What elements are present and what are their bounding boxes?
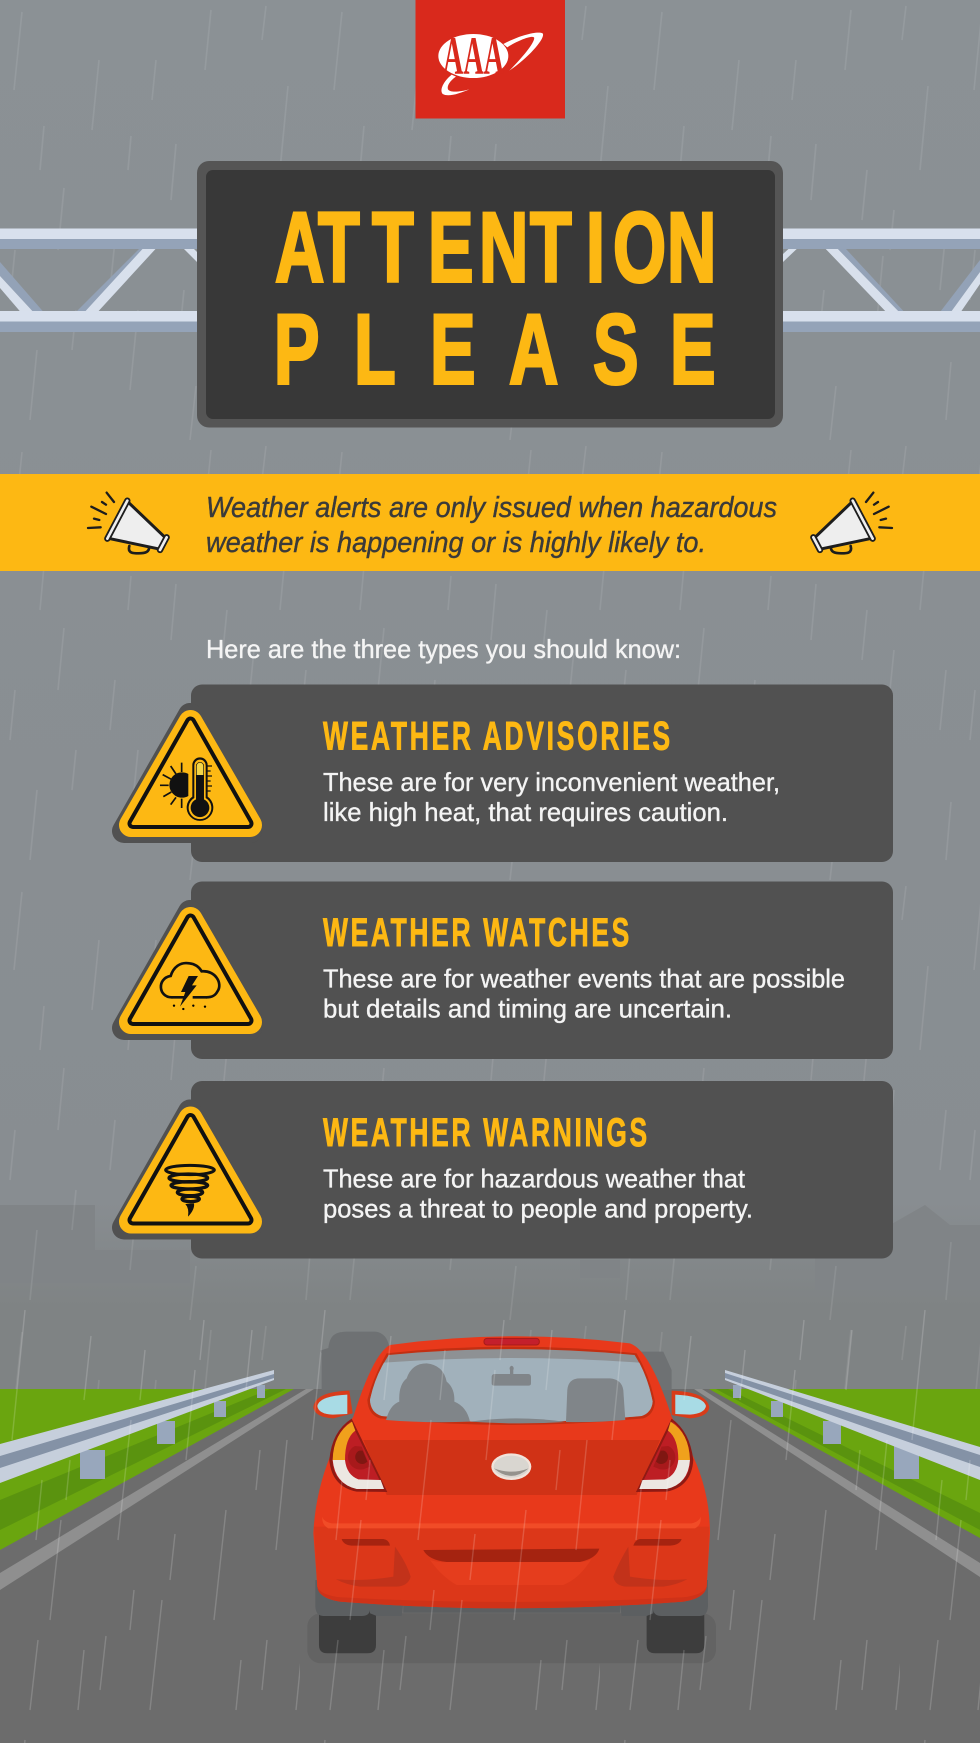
driver seat <box>386 1363 470 1422</box>
card: weather advisories <box>124 684 893 862</box>
window frame <box>367 1347 655 1425</box>
hatch panel <box>363 1440 660 1495</box>
rear parcel shelf <box>470 1418 566 1423</box>
interior rear-view mirror <box>492 1366 531 1386</box>
high-mount brake light <box>484 1338 539 1345</box>
intro text: Here are the three types you should know: <box>206 634 681 664</box>
card: weather warnings <box>124 1081 893 1258</box>
bumper highlight <box>322 1517 701 1528</box>
title line: PLEASE: PLEASE <box>274 295 716 406</box>
road scene <box>0 1389 980 1743</box>
icon: right megaphone <box>813 493 892 553</box>
bumper centre recess <box>430 1559 592 1585</box>
warning triangle with tornado icon <box>124 1112 250 1228</box>
card heading: WEATHER ADVISORIES <box>323 714 670 759</box>
right tail light <box>636 1419 693 1492</box>
card body text: poses a threat to people and property. <box>323 1194 753 1224</box>
rain over the road and car <box>0 1310 980 1743</box>
car ground shadow <box>307 1613 716 1663</box>
car underbody <box>315 1580 708 1616</box>
AAA logo: AAA <box>443 26 504 86</box>
band message text: weather is happening or is highly likely to. <box>206 527 706 559</box>
car wheels <box>319 1607 704 1653</box>
card body text: These are for hazardous weather that <box>323 1164 746 1194</box>
car badge <box>491 1453 531 1480</box>
icon: left megaphone <box>88 493 167 553</box>
card heading: WEATHER WATCHES <box>323 911 629 955</box>
lower body strip <box>317 1587 707 1608</box>
card body text: These are for very inconvenient weather, <box>323 767 780 797</box>
sign inner face <box>206 170 775 419</box>
band message text: Weather alerts are only issued when hazardous <box>206 492 777 524</box>
card panel <box>191 684 893 862</box>
card heading: WEATHER WARNINGS <box>323 1111 647 1155</box>
left guard rail <box>0 1370 274 1483</box>
bumper shading <box>336 1547 687 1587</box>
distant vehicles <box>320 1332 672 1390</box>
overhead gantry truss <box>0 228 980 332</box>
yellow message band <box>0 474 980 571</box>
card: weather watches <box>124 882 893 1059</box>
card body text: but details and timing are uncertain. <box>323 994 732 1024</box>
side mirrors <box>313 1391 709 1418</box>
distant building silhouettes <box>0 1205 980 1290</box>
warning triangle with sun and thermometer icon <box>124 715 250 831</box>
AAA logo <box>416 0 565 118</box>
right guard rail <box>725 1370 980 1480</box>
rear window glass <box>370 1358 653 1422</box>
red car, rear view <box>307 1336 716 1663</box>
bumper vents <box>342 1539 682 1562</box>
left tail light <box>329 1419 387 1492</box>
lower bumper <box>314 1527 709 1602</box>
card panel <box>191 1081 893 1258</box>
rear window frame band <box>370 1349 653 1422</box>
overhead sign panel <box>197 161 783 428</box>
card body text: like high heat, that requires caution. <box>323 797 728 827</box>
car body <box>313 1336 710 1608</box>
passenger seat <box>566 1378 625 1422</box>
card body text: These are for weather events that are possible <box>323 964 845 994</box>
warning triangle with storm cloud icon <box>124 912 250 1028</box>
title line: ATTENTION: ATTENTION <box>275 193 716 304</box>
card panel <box>191 882 893 1059</box>
